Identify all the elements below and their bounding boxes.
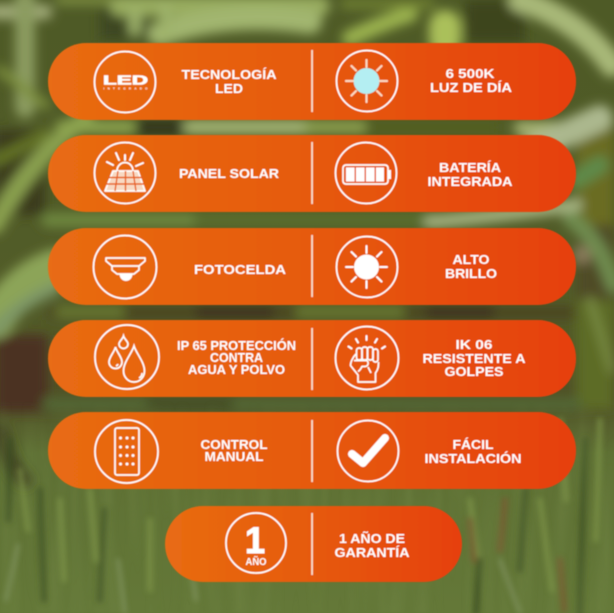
- divider 5: [311, 420, 313, 482]
- icon: one year: AÑO: [246, 555, 267, 568]
- icon: check mark: [338, 420, 398, 482]
- panel: row 2: [48, 135, 576, 212]
- text: Tecnología LED: TECNOLOGÍA: [182, 67, 277, 82]
- icon: one year: [226, 513, 286, 573]
- text: IK06: IK 06: [456, 337, 492, 352]
- icon: battery: [336, 142, 396, 204]
- text: Control manual: CONTROL: [200, 437, 268, 452]
- text: IP65: [177, 338, 296, 377]
- text: Alto brillo: BRILLO: [445, 266, 497, 281]
- icon: remote control: [95, 420, 158, 483]
- panel: row 1: [48, 43, 576, 120]
- icon: fist: [336, 326, 398, 390]
- icon: solar panel: [94, 142, 156, 204]
- icon: LED: INTEGRADO: [104, 86, 148, 90]
- text: IK06: GOLPES: [444, 364, 504, 379]
- icon: LED: [94, 52, 156, 112]
- text: 1 año de garantía: [334, 531, 410, 560]
- text: Batería integrada: BATERÍA: [439, 160, 502, 175]
- text: Tecnología LED: [182, 67, 277, 96]
- icon: daylight sun: [336, 50, 398, 112]
- text: Fotocelda: FOTOCELDA: [194, 262, 287, 277]
- icon: water drops: [95, 325, 159, 389]
- text: Control manual: [200, 437, 268, 464]
- text: Fácil instalación: FÁCIL: [452, 437, 494, 452]
- text: IP65: IP 65 PROTECCIÓN: [177, 338, 296, 353]
- divider 4: [311, 328, 313, 390]
- text: IK06: RESISTENTE A: [422, 351, 526, 366]
- text: Batería integrada: [428, 160, 513, 189]
- text: IP65: AGUA Y POLVO: [188, 362, 285, 377]
- icon: high brightness sun: [336, 236, 398, 298]
- text: Alto brillo: ALTO: [452, 252, 490, 267]
- text: Panel solar: PANEL SOLAR: [179, 166, 280, 181]
- icon: photocell: [94, 236, 156, 298]
- text: IK06: [422, 337, 526, 379]
- text: Control manual: MANUAL: [204, 449, 264, 464]
- panel: row 3: [48, 228, 576, 305]
- text: Fácil instalación: [424, 437, 522, 466]
- text: 6500K: LUZ DE DÍA: [430, 80, 513, 95]
- divider 1: [311, 50, 313, 112]
- text: Alto brillo: [445, 252, 497, 281]
- text: Fácil instalación: INSTALACIÓN: [424, 451, 522, 466]
- text: 6500K: [430, 66, 513, 95]
- divider 2: [311, 142, 313, 204]
- text: 6500K: 6 500K: [446, 66, 495, 81]
- text: Batería integrada: INTEGRADA: [428, 174, 513, 189]
- panel: row 6 warranty: [165, 506, 462, 582]
- panel: row 4: [48, 320, 576, 397]
- text: IP65: CONTRA: [210, 350, 264, 365]
- panel: row 5: [48, 412, 576, 489]
- icon: LED: LED: [103, 74, 148, 88]
- text: 1 año de garantía: 1 AÑO DE: [339, 531, 405, 546]
- text: Tecnología LED: LED: [215, 81, 243, 96]
- divider 6: [311, 513, 313, 575]
- text: 1 año de garantía: GARANTÍA: [334, 545, 410, 560]
- icon: one year: 1: [245, 520, 265, 561]
- divider 3: [311, 235, 313, 297]
